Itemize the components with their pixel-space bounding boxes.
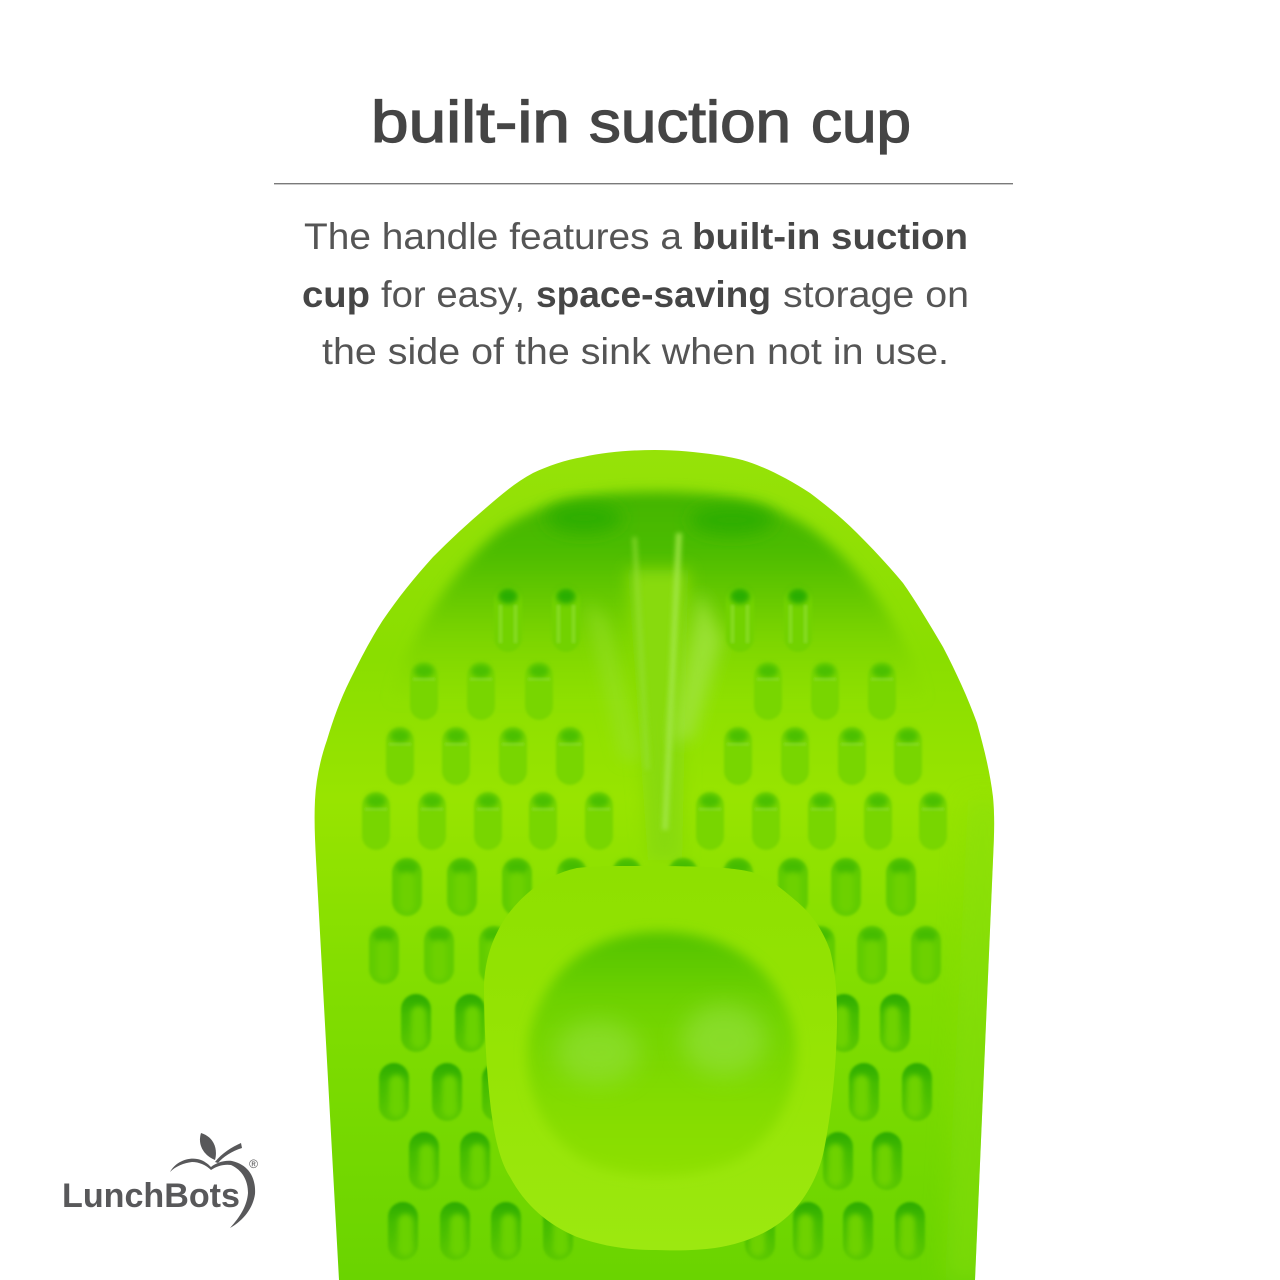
suction cup xyxy=(484,866,837,1250)
logo wordmark: LunchBots xyxy=(62,1177,240,1215)
body text: built-in suction xyxy=(692,216,968,257)
logo apple xyxy=(170,1133,255,1228)
title: built-in xyxy=(371,90,570,155)
body text: for easy, xyxy=(381,274,525,315)
body text: space-saving xyxy=(536,274,771,315)
title xyxy=(371,90,911,155)
suction cup inner dome xyxy=(527,932,796,1176)
body text: storage on xyxy=(783,274,969,315)
title: suction xyxy=(589,90,791,155)
divider rule xyxy=(274,183,1013,184)
body text: the side of the sink when not in use. xyxy=(322,331,949,372)
LunchBots logo xyxy=(62,1133,258,1228)
body text: The handle features a xyxy=(304,216,682,257)
lighter right edge xyxy=(950,799,994,1278)
recessed dark shading at top of handle xyxy=(414,484,902,658)
slot rows xyxy=(362,586,947,1260)
silicone handle xyxy=(315,450,1000,1280)
body text: cup xyxy=(302,274,370,315)
central ridge xyxy=(586,533,722,860)
title: cup xyxy=(811,90,911,155)
registered mark: ® xyxy=(249,1157,258,1171)
body text xyxy=(302,216,969,372)
infographic canvas xyxy=(64,98,1013,1280)
